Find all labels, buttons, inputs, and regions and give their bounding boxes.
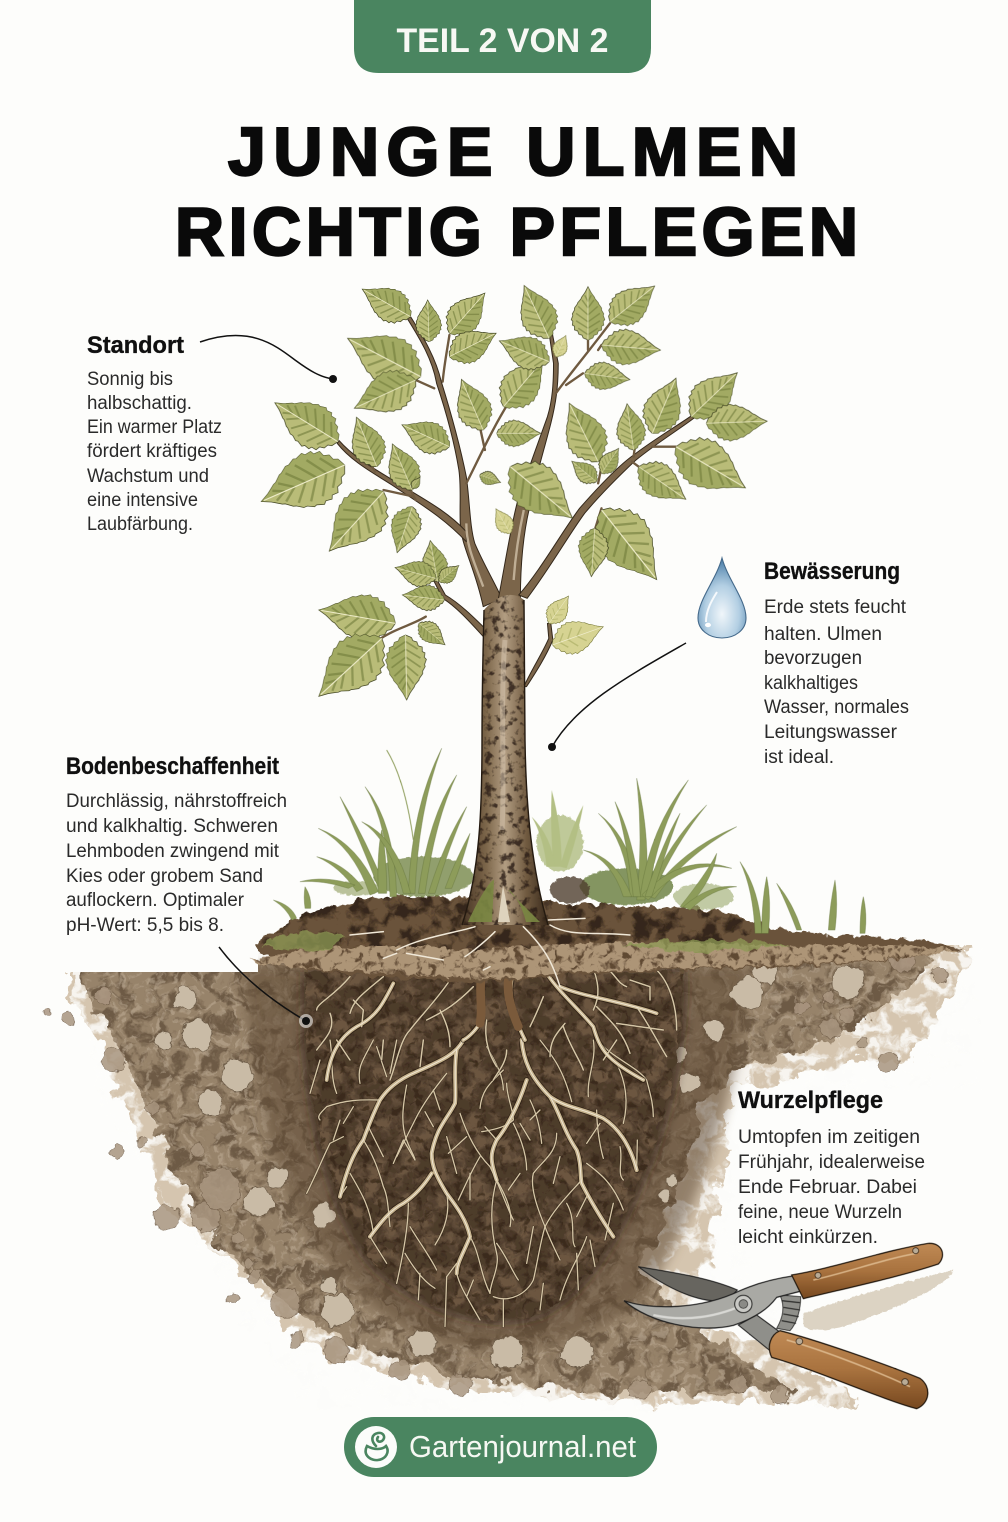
text block: Wurzelpflege: leicht einkürzen. bbox=[738, 1227, 878, 1248]
root ball bbox=[300, 970, 690, 1330]
text block: Standort: Laubfärbung. bbox=[87, 514, 193, 535]
text block: Wurzelpflege bbox=[738, 1087, 925, 1248]
callout line: Bodenbeschaffenheit bbox=[219, 947, 313, 1028]
text block: Bewässerung bbox=[764, 558, 909, 768]
header ribbon: Teil 2 von 2 bbox=[354, 0, 651, 73]
illustration: pruning shears bbox=[624, 1243, 953, 1409]
text block: Standort: Wachstum und bbox=[87, 466, 209, 487]
roots bbox=[307, 960, 677, 1327]
text block: Bewässerung: Bewässerung bbox=[764, 558, 900, 585]
text block: Bodenbeschaffenheit: und kalkhaltig. Schweren bbox=[66, 816, 278, 837]
soil cross-section bbox=[43, 940, 980, 1410]
text block: Bewässerung: ist ideal. bbox=[764, 747, 834, 768]
text block: Wurzelpflege: Frühjahr, idealerweise bbox=[738, 1152, 925, 1173]
brand name: Gartenjournal.net bbox=[409, 1429, 636, 1464]
text block: Wurzelpflege: Umtopfen im zeitigen bbox=[738, 1127, 920, 1148]
callout line: Bewässerung bbox=[548, 643, 686, 751]
text block: Standort: Sonnig bis bbox=[87, 369, 173, 390]
text block: Wurzelpflege: Wurzelpflege bbox=[738, 1087, 883, 1114]
text block: Bewässerung: Leitungswasser bbox=[764, 722, 898, 743]
text block: Standort: Standort bbox=[87, 332, 184, 359]
tree foliage bbox=[250, 272, 768, 716]
header ribbon: Teil 2 von 2: TEIL 2 VON 2 bbox=[396, 22, 608, 60]
branches bbox=[337, 317, 694, 687]
title: RICHTIG PFLEGEN bbox=[175, 194, 858, 270]
text block: Bodenbeschaffenheit: Bodenbeschaffenheit bbox=[66, 753, 279, 780]
footer badge: Gartenjournal.net bbox=[344, 1417, 657, 1477]
grass clumps bbox=[273, 748, 866, 933]
text block: Wurzelpflege: feine, neue Wurzeln bbox=[738, 1202, 902, 1223]
text block: Standort: halbschattig. bbox=[87, 393, 192, 414]
text block: Bewässerung: halten. Ulmen bbox=[764, 624, 882, 645]
text block: Bodenbeschaffenheit: Lehmboden zwingend mit bbox=[66, 841, 280, 862]
text block: Wurzelpflege: Ende Februar. Dabei bbox=[738, 1177, 917, 1198]
text block: Standort: eine intensive bbox=[87, 490, 198, 511]
title: JUNGE ULMEN bbox=[228, 114, 798, 190]
text block: Bewässerung: Wasser, normales bbox=[764, 697, 909, 718]
text block: Bewässerung: Erde stets feucht bbox=[764, 597, 907, 618]
text block: Standort: fördert kräftiges bbox=[87, 441, 217, 462]
text block: Standort: Ein warmer Platz bbox=[87, 417, 222, 438]
text block: Standort bbox=[87, 332, 222, 535]
text block: Bodenbeschaffenheit: Kies oder grobem Sand bbox=[66, 866, 263, 887]
icon: logo bbox=[355, 1426, 397, 1468]
text block: Bewässerung: bevorzugen bbox=[764, 648, 862, 669]
icon: water drop bbox=[698, 558, 746, 638]
tree trunk bbox=[462, 595, 548, 925]
callout line: Standort bbox=[200, 335, 337, 383]
text block: Bodenbeschaffenheit: pH-Wert: 5,5 bis 8. bbox=[66, 915, 224, 936]
soil pebbles bbox=[43, 947, 947, 1404]
ground surface mound bbox=[250, 897, 962, 987]
text block: Bodenbeschaffenheit: Durchlässig, nährstoffreich bbox=[66, 791, 287, 812]
text block: Bodenbeschaffenheit: auflockern. Optimaler bbox=[66, 890, 245, 911]
text block: Bewässerung: kalkhaltiges bbox=[764, 673, 858, 694]
title bbox=[175, 114, 858, 270]
soil stones bbox=[155, 960, 864, 1369]
text block: Bodenbeschaffenheit bbox=[66, 753, 287, 936]
